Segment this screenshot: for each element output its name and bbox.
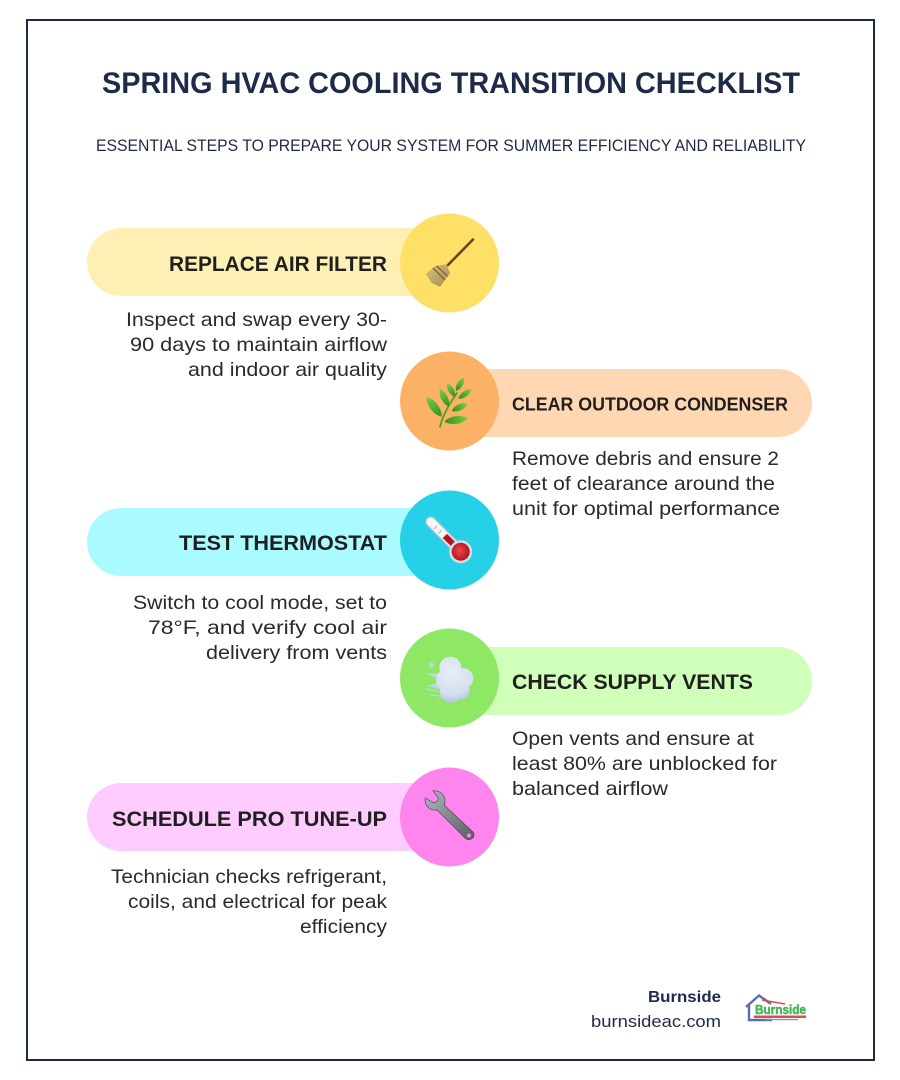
brand name: Burnside	[648, 989, 721, 1006]
icon circle: yellow	[400, 214, 499, 312]
logo: Burnside house: Burnside	[755, 1002, 806, 1017]
text: clear outdoor condenser description: feet of clearance around the	[512, 473, 775, 495]
text: replace air filter description: Inspect and swap every 30-	[126, 309, 387, 331]
icon: herb leaves	[423, 376, 473, 427]
text: schedule pro tune-up description	[111, 866, 387, 938]
panel: clear outdoor condenser	[400, 352, 812, 520]
text: schedule pro tune-up description: coils, and electrical for peak	[128, 891, 387, 913]
text: test thermostat description: 78°F, and verify cool air	[148, 617, 388, 639]
subtitle: ESSENTIAL STEPS TO PREPARE YOUR SYSTEM FOR SUMMER EFFICIENCY AND RELIABILITY	[96, 137, 806, 155]
logo: Burnside house	[746, 996, 806, 1020]
footer brand	[591, 989, 721, 1031]
website: burnsideac.com	[591, 1013, 721, 1031]
icon circle: pink	[400, 768, 499, 866]
text: test thermostat description	[133, 592, 388, 664]
heading: schedule pro tune-up: SCHEDULE PRO TUNE-UP	[112, 808, 387, 831]
text: replace air filter description	[126, 309, 388, 381]
pill: schedule pro tune-up	[87, 783, 440, 851]
icon circle: cyan	[400, 490, 499, 590]
text: schedule pro tune-up description: Technician checks refrigerant,	[111, 866, 387, 888]
pill: clear outdoor condenser	[460, 369, 812, 437]
icon: wrench	[425, 791, 474, 840]
text: schedule pro tune-up description: efficiency	[300, 916, 387, 938]
panel: replace air filter	[87, 214, 499, 381]
icon: thermometer	[431, 522, 472, 563]
panel: check supply vents	[400, 628, 812, 800]
panel: test thermostat	[87, 490, 499, 664]
heading: test thermostat: TEST THERMOSTAT	[179, 532, 387, 555]
text: clear outdoor condenser description: Remove debris and ensure 2	[512, 448, 779, 470]
panel: schedule pro tune-up	[87, 768, 499, 938]
icon: broom	[426, 240, 473, 287]
text: test thermostat description: Switch to cool mode, set to	[133, 592, 387, 614]
text: replace air filter description: 90 days to maintain airflow	[130, 334, 388, 356]
text: clear outdoor condenser description	[512, 448, 780, 520]
text: check supply vents description: balanced airflow	[512, 778, 669, 800]
icon circle: orange	[400, 352, 499, 450]
heading: clear outdoor condenser: CLEAR OUTDOOR CONDENSER	[512, 394, 788, 414]
text: check supply vents description	[512, 728, 778, 800]
heading: check supply vents: CHECK SUPPLY VENTS	[512, 671, 753, 694]
text: clear outdoor condenser description: unit for optimal performance	[512, 498, 780, 520]
pill: test thermostat	[87, 508, 440, 576]
heading: replace air filter: REPLACE AIR FILTER	[169, 253, 387, 276]
title: SPRING HVAC COOLING TRANSITION CHECKLIST	[102, 67, 800, 100]
pill: check supply vents	[460, 647, 812, 715]
text: check supply vents description: least 80% are unblocked for	[512, 753, 778, 775]
pill: replace air filter	[87, 228, 440, 296]
icon: wind puff	[426, 657, 473, 703]
text: replace air filter description: and indoor air quality	[188, 359, 387, 381]
text: check supply vents description: Open vents and ensure at	[512, 728, 755, 750]
icon circle: green	[400, 628, 499, 728]
text: test thermostat description: delivery from vents	[206, 642, 387, 664]
